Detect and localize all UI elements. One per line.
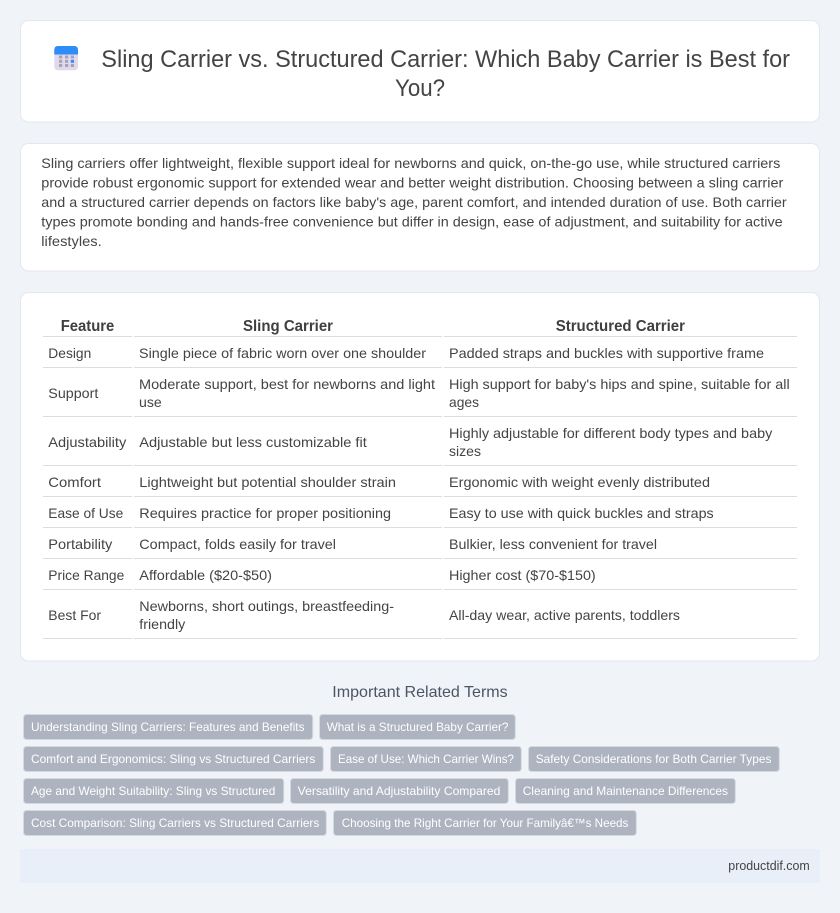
row: support: use <box>139 394 162 410</box>
footer bar: productdif.com <box>728 858 810 873</box>
table header row: Sling Carrier <box>243 318 333 335</box>
row: best for <box>48 598 680 632</box>
row: best for: All-day wear, active parents, toddlers <box>449 607 680 623</box>
row: adjustability: Adjustability <box>48 434 126 450</box>
row: design: Single piece of fabric worn over one shoulder <box>139 345 426 361</box>
row: portability: Compact, folds easily for travel <box>139 536 336 552</box>
row: best for: Best For <box>48 607 101 623</box>
row: portability: Bulkier, less convenient for travel <box>449 536 657 552</box>
row: best for: Newborns, short outings, breastfeeding- <box>139 598 394 614</box>
row: support: Moderate support, best for newborns and light <box>139 376 435 392</box>
table header row <box>61 318 685 335</box>
tag: cleaning and maintenance <box>516 778 735 804</box>
row: support: ages <box>449 394 479 410</box>
row: adjustability: Adjustable but less customizable fit <box>139 434 367 450</box>
tag: ease of use: Ease of Use: Which Carrier Wins? <box>338 752 514 766</box>
row: price range <box>48 567 596 583</box>
tag: safety considerations: Safety Considerations for Both Carrier Types <box>536 752 771 766</box>
tag: cleaning and maintenance: Cleaning and Maintenance Differences <box>523 784 728 798</box>
heading: important related terms: Important Related Terms <box>332 684 508 701</box>
tag: comfort and ergonomics: Comfort and Ergonomics: Sling vs Structured Carriers <box>31 752 315 766</box>
table header row: Feature <box>61 318 114 335</box>
row: adjustability <box>48 425 772 459</box>
row: adjustability: sizes <box>449 443 481 459</box>
table header row: Structured Carrier <box>556 318 685 335</box>
panel: summary paragraph: Sling carriers offer lightweight, flexible support ideal for newborns and quick, on-the-go use, while structured carriers <box>41 155 780 171</box>
row: support: Support <box>48 385 98 401</box>
panel: title header <box>20 20 820 122</box>
tag: safety considerations <box>528 746 779 772</box>
row: ease of use <box>48 505 714 521</box>
related term tags <box>24 714 779 836</box>
tag: structured baby carrier: What is a Structured Baby Carrier? <box>327 720 509 734</box>
icon: calendar <box>54 46 78 70</box>
tag: versatility and adjustability <box>290 778 508 804</box>
row: ease of use: Easy to use with quick buckles and straps <box>449 505 714 521</box>
row: price range: Price Range <box>48 567 125 583</box>
panel: summary paragraph: lifestyles. <box>41 233 102 249</box>
row: ease of use: Requires practice for proper positioning <box>139 505 391 521</box>
row: design: Padded straps and buckles with supportive frame <box>449 345 764 361</box>
row: price range: Higher cost ($70-$150) <box>449 567 596 583</box>
tag: age and weight suitability: Age and Weight Suitability: Sling vs Structured <box>31 784 275 798</box>
tag: comfort and ergonomics <box>24 746 323 772</box>
row: ease of use: Ease of Use <box>48 505 124 521</box>
tag: structured baby carrier <box>320 714 515 740</box>
footer bar <box>20 849 820 883</box>
panel: summary paragraph: types promote bonding and hands-free convenience but differ in design, ease of adjustment, and suitability for active <box>41 214 783 230</box>
tag: cost comparison: Cost Comparison: Sling Carriers vs Structured Carriers <box>31 816 319 830</box>
row: comfort: Lightweight but potential shoulder strain <box>139 474 396 490</box>
row: portability: Portability <box>48 536 112 552</box>
row: comfort: Comfort <box>48 474 101 490</box>
tag: versatility and adjustability: Versatility and Adjustability Compared <box>298 784 500 798</box>
tag: ease of use <box>330 746 521 772</box>
panel: comparison table <box>20 292 820 661</box>
row: adjustability: Highly adjustable for different body types and baby <box>449 425 772 441</box>
tag: choosing the right carrier: Choosing the Right Carrier for Your Familyâ€™s Needs <box>342 816 628 830</box>
tag: cost comparison <box>24 810 326 836</box>
tag: choosing the right carrier <box>334 810 636 836</box>
tag: age and weight suitability <box>24 778 284 804</box>
row: support: High support for baby's hips and spine, suitable for all <box>449 376 790 392</box>
row: support <box>48 376 790 410</box>
title: Sling Carrier vs. Structured Carrier: Which Baby Carrier is Best for <box>101 46 790 73</box>
row: design <box>48 345 764 361</box>
panel: summary paragraph <box>20 144 820 271</box>
row: design: Design <box>48 345 91 361</box>
row: comfort <box>48 474 710 490</box>
row: best for: friendly <box>139 616 185 632</box>
tag: understanding sling carriers <box>24 714 313 740</box>
row: comfort: Ergonomic with weight evenly distributed <box>449 474 710 490</box>
tag: understanding sling carriers: Understanding Sling Carriers: Features and Benefits <box>31 720 304 734</box>
panel: summary paragraph: and a structured carrier depends on factors like baby's age, parent comfort, and intended duration of use. Both carrier <box>41 194 787 210</box>
row: portability <box>48 536 657 552</box>
title: You? <box>395 75 445 102</box>
panel: summary paragraph: provide robust ergonomic support for extended wear and better weight distribution. Choosing between a sling carrier <box>41 174 784 190</box>
title <box>101 46 790 102</box>
row: price range: Affordable ($20-$50) <box>139 567 272 583</box>
